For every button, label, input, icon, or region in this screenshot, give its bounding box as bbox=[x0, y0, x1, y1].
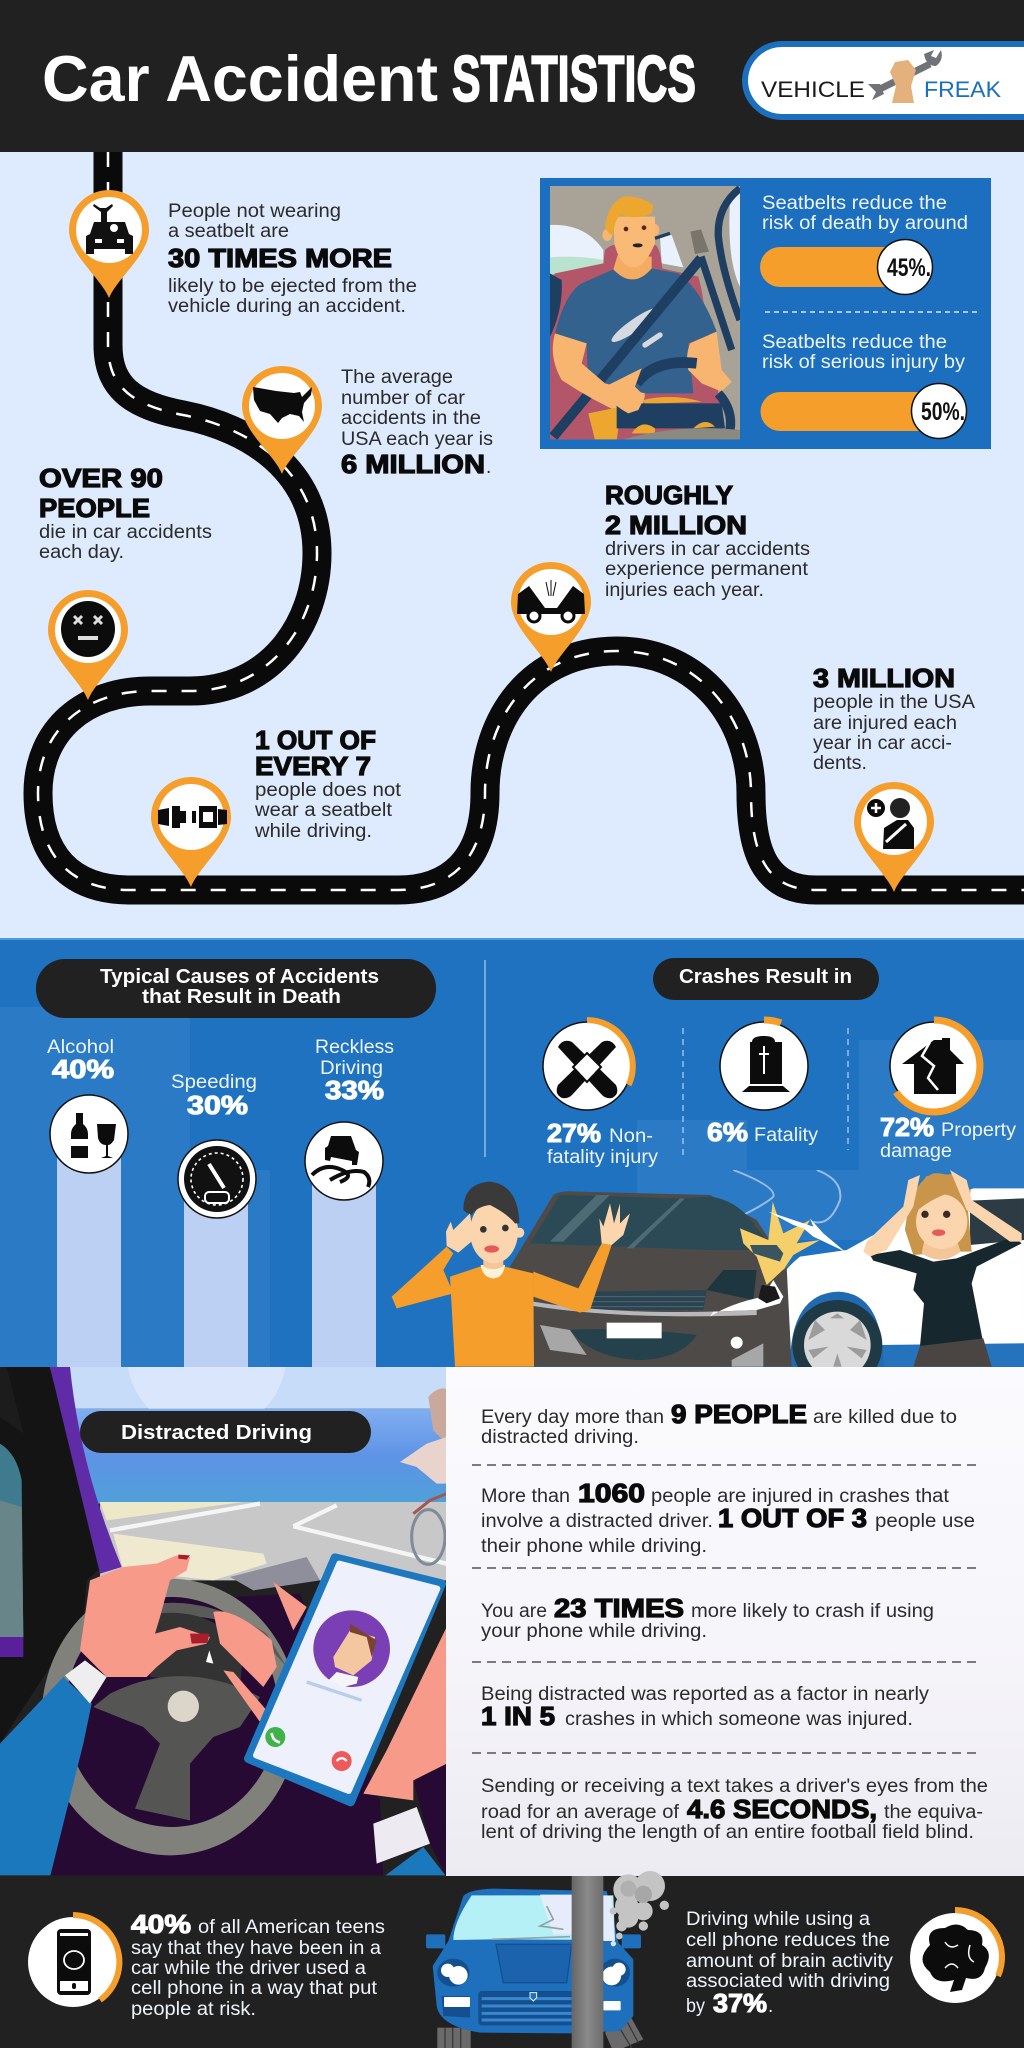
bar: alcohol 40 percent: Alcohol bbox=[47, 1037, 114, 1058]
result: fatality 6 percent: Fatality bbox=[754, 1125, 819, 1146]
logo: Vehicle Freak bbox=[745, 44, 1024, 117]
stat: 6 million: The average bbox=[341, 367, 453, 388]
smoke wisps bbox=[733, 1170, 840, 1230]
stat: 1 out of every 7: wear a seatbelt bbox=[254, 800, 393, 821]
fact: 4.6 seconds: road for an average of bbox=[481, 1802, 680, 1823]
fact: 1060 injured: people are injured in crashes that bbox=[651, 1486, 950, 1507]
pill heading: crashes result in: Crashes Result in bbox=[679, 966, 852, 988]
pill heading: typical causes bbox=[36, 959, 436, 1018]
illustration: blue car hitting a pole bbox=[426, 1871, 669, 2048]
stat: 1 out of every 7: people does not bbox=[255, 780, 402, 801]
right hand on phone bbox=[363, 1627, 447, 1800]
fact: 1060 injured: 1 OUT OF 3 bbox=[718, 1503, 867, 1533]
result: fatality 6 percent: 6% bbox=[707, 1117, 748, 1147]
bar: alcohol 40 percent: 40% bbox=[52, 1054, 114, 1084]
text: risk of death: risk of death by around bbox=[762, 213, 968, 234]
stat: 3 million: people in the USA bbox=[813, 692, 975, 713]
text: brain activity: associated with driving bbox=[686, 1971, 890, 1992]
cyclist bbox=[400, 1388, 447, 1564]
result: non-fatality injury 27 percent bbox=[543, 1020, 659, 1168]
text: risk of death: Seatbelts reduce the bbox=[762, 193, 947, 214]
stat: 6 million: 6 MILLION bbox=[341, 449, 485, 479]
car interior bbox=[43, 1594, 383, 1877]
fingers behind phone bbox=[213, 1582, 307, 1722]
driver hand and sleeve bbox=[0, 1555, 210, 1877]
fact: 1060 injured: 1060 bbox=[578, 1478, 645, 1508]
title: Car Accident bbox=[42, 42, 438, 115]
phone bbox=[248, 1558, 442, 1802]
text: 40 percent of teens: people at risk. bbox=[131, 1999, 256, 2020]
text: serious injury: Seatbelts reduce the bbox=[762, 332, 947, 353]
title bbox=[42, 42, 696, 115]
stat: over 90 people bbox=[39, 463, 212, 563]
white car bbox=[786, 1188, 1024, 1367]
panel: distracted driving text bbox=[446, 1367, 1024, 1876]
stat: over 90 people: OVER 90 bbox=[39, 463, 163, 493]
stat: over 90 people: die in car accidents bbox=[39, 522, 212, 543]
result: property damage 72 percent bbox=[880, 1020, 1017, 1162]
panel: distracted driving illustration bbox=[0, 1367, 446, 1876]
fact: 23 times bbox=[481, 1593, 934, 1642]
dark car bbox=[510, 1191, 792, 1367]
pill heading: distracted driving bbox=[80, 1411, 371, 1453]
text: 40 percent of teens: say that they have been in a bbox=[131, 1938, 381, 1959]
stat: roughly 2 million: drivers in car accidents bbox=[605, 539, 810, 560]
stat: 30 times more: 30 TIMES MORE bbox=[168, 243, 392, 273]
fact: 1 in 5: Being distracted was reported as a factor in nearly bbox=[481, 1684, 930, 1705]
stat: roughly 2 million bbox=[605, 480, 810, 601]
logo: Vehicle Freak: VEHICLE bbox=[761, 77, 865, 102]
steering wheel bbox=[42, 1579, 298, 1855]
pill heading: typical causes: Typical Causes of Accidents bbox=[100, 966, 379, 988]
text: serious injury bbox=[762, 332, 966, 373]
stat: over 90 people: each day. bbox=[39, 542, 124, 563]
fact: 9 people bbox=[481, 1399, 957, 1448]
bar: 45 percent bbox=[760, 240, 932, 294]
stat: 6 million: USA each year is bbox=[341, 429, 493, 450]
fact: 9 people: distracted driving. bbox=[481, 1427, 639, 1448]
stat: roughly 2 million: injuries each year. bbox=[605, 580, 764, 601]
text: brain activity: Driving while using a bbox=[686, 1909, 870, 1930]
stat: 30 times more bbox=[168, 201, 417, 317]
fact: 1060 injured: More than bbox=[481, 1486, 570, 1507]
bar: 50 percent: 50%. bbox=[921, 398, 965, 426]
stat: 1 out of every 7: EVERY 7 bbox=[255, 751, 371, 781]
fact: 1060 injured bbox=[481, 1478, 975, 1557]
bar: alcohol 40 percent bbox=[47, 1037, 128, 1367]
fact: 9 people: 9 PEOPLE bbox=[671, 1399, 807, 1429]
pill heading: typical causes: that Result in Death bbox=[142, 986, 341, 1008]
text: 40 percent of teens: car while the driver used a bbox=[131, 1958, 366, 1979]
fact: 1 in 5: 1 IN 5 bbox=[481, 1701, 555, 1731]
stat: 30 times more: a seatbelt are bbox=[168, 221, 289, 242]
title: STATISTICS bbox=[452, 42, 696, 115]
result: property damage 72 percent: damage bbox=[880, 1141, 952, 1162]
bar: speeding 30 percent bbox=[171, 1072, 257, 1367]
pill heading: distracted driving: Distracted Driving bbox=[121, 1422, 312, 1444]
panel: seatbelt stats bbox=[540, 178, 991, 449]
bar: reckless driving 33 percent: 33% bbox=[325, 1075, 384, 1105]
fact: 9 people: are killed due to bbox=[813, 1407, 957, 1428]
map pin: car crash bbox=[511, 562, 591, 672]
text: risk of death bbox=[762, 193, 968, 234]
pill heading: crashes result in bbox=[653, 958, 879, 1000]
bar: 45 percent: 45%. bbox=[887, 254, 931, 282]
result: non-fatality injury 27 percent: fatality injury bbox=[547, 1147, 659, 1168]
result: property damage 72 percent: Property bbox=[941, 1120, 1017, 1141]
fact: 4.6 seconds bbox=[481, 1776, 988, 1843]
stat: roughly 2 million: experience permanent bbox=[605, 559, 809, 580]
man bbox=[392, 1182, 630, 1367]
stat: 6 million: number of car bbox=[341, 388, 466, 409]
fact: 4.6 seconds: 4.6 SECONDS, bbox=[687, 1794, 877, 1824]
text: brain activity: 37% bbox=[713, 1988, 767, 2018]
bar: 50 percent bbox=[760, 384, 966, 438]
bar: reckless driving 33 percent bbox=[305, 1037, 394, 1367]
stat: 30 times more: People not wearing bbox=[168, 201, 341, 222]
text: 40 percent of teens: cell phone in a way that put bbox=[131, 1978, 378, 1999]
fact: 23 times: more likely to crash if using bbox=[691, 1601, 934, 1622]
text: brain activity: cell phone reduces the bbox=[686, 1930, 890, 1951]
fact: 1 in 5 bbox=[481, 1684, 930, 1731]
footer band bbox=[0, 1871, 1024, 2048]
stat: 1 out of every 7 bbox=[254, 725, 402, 842]
stat: 6 million bbox=[341, 367, 493, 479]
text: serious injury: risk of serious injury by bbox=[762, 352, 966, 373]
illustration: crash scene bbox=[392, 1170, 1024, 1367]
logo: Vehicle Freak: FREAK bbox=[924, 77, 1001, 102]
stat: roughly 2 million: ROUGHLY bbox=[605, 480, 733, 510]
fact: 4.6 seconds: Sending or receiving a text takes a driver's eyes from the bbox=[481, 1776, 988, 1797]
icon: phone in circle bbox=[28, 1915, 119, 2007]
stat: 1 out of every 7: while driving. bbox=[254, 821, 372, 842]
stat: 6 million: accidents in the bbox=[341, 408, 481, 429]
page background: light road section bbox=[0, 152, 1024, 940]
stat: 6 million: . bbox=[486, 457, 491, 478]
bar: reckless driving 33 percent: Driving bbox=[320, 1058, 383, 1079]
result: non-fatality injury 27 percent: Non- bbox=[609, 1126, 653, 1147]
map pin: medic bbox=[854, 782, 934, 892]
result: fatality 6 percent bbox=[707, 1020, 819, 1147]
text: 40 percent of teens: 40% bbox=[131, 1909, 191, 1939]
impact pole bbox=[572, 1876, 603, 2048]
icon: brain in circle bbox=[910, 1910, 1002, 2003]
stat: 30 times more: likely to be ejected from the bbox=[168, 276, 417, 297]
woman bbox=[863, 1170, 1022, 1367]
fact: 9 people: Every day more than bbox=[481, 1407, 664, 1428]
text: brain activity: . bbox=[768, 1996, 773, 2017]
map pin: seatbelt buckle bbox=[151, 777, 231, 887]
car pillar bbox=[0, 1367, 102, 1744]
stat: 3 million: year in car acci- bbox=[813, 733, 952, 754]
fact: 1 in 5: crashes in which someone was injured. bbox=[565, 1709, 913, 1730]
city skyline backdrop bbox=[0, 1007, 1024, 1367]
text: brain activity: amount of brain activity bbox=[686, 1951, 894, 1972]
bar: reckless driving 33 percent: Reckless bbox=[315, 1037, 394, 1058]
text: 40 percent of teens: of all American teens bbox=[198, 1917, 385, 1938]
result: non-fatality injury 27 percent: 27% bbox=[547, 1118, 601, 1148]
illustration: driver with seatbelt bbox=[550, 186, 740, 440]
panel: causes and results bbox=[0, 938, 1024, 1390]
stat: 3 million: dents. bbox=[813, 753, 867, 774]
explosion star bbox=[740, 1202, 845, 1285]
fact: 23 times: your phone while driving. bbox=[481, 1621, 707, 1642]
winding road bbox=[38, 152, 1024, 890]
stat: 3 million: 3 MILLION bbox=[813, 663, 955, 693]
text: 40 percent of teens bbox=[131, 1909, 385, 2020]
map pin: deaths face bbox=[48, 590, 128, 700]
fact: 4.6 seconds: the equiva- bbox=[884, 1802, 983, 1823]
text: brain activity: by bbox=[686, 1996, 705, 2017]
stat: 3 million bbox=[813, 663, 975, 774]
smoke bbox=[610, 1871, 669, 1946]
fact: 1060 injured: their phone while driving. bbox=[481, 1536, 707, 1557]
map pin: USA bbox=[242, 366, 322, 474]
stat: over 90 people: PEOPLE bbox=[39, 493, 150, 523]
map pin: ejected from car bbox=[69, 190, 149, 298]
stat: 30 times more: vehicle during an accident. bbox=[168, 296, 406, 317]
fact: 1060 injured: involve a distracted driver. bbox=[481, 1511, 713, 1532]
fact: 23 times: 23 TIMES bbox=[554, 1593, 684, 1623]
stat: 3 million: are injured each bbox=[813, 713, 957, 734]
bar: speeding 30 percent: Speeding bbox=[171, 1072, 257, 1093]
header band bbox=[0, 0, 1024, 152]
stat: roughly 2 million: 2 MILLION bbox=[605, 510, 747, 540]
fact: 1060 injured: people use bbox=[875, 1511, 975, 1532]
fact: 4.6 seconds: lent of driving the length of an entire football field blind. bbox=[481, 1822, 974, 1843]
fact: 23 times: You are bbox=[481, 1601, 547, 1622]
text: brain activity bbox=[686, 1909, 894, 2018]
result: property damage 72 percent: 72% bbox=[880, 1112, 934, 1142]
bar: speeding 30 percent: 30% bbox=[187, 1090, 248, 1120]
stat: 1 out of every 7: 1 OUT OF bbox=[255, 725, 376, 755]
